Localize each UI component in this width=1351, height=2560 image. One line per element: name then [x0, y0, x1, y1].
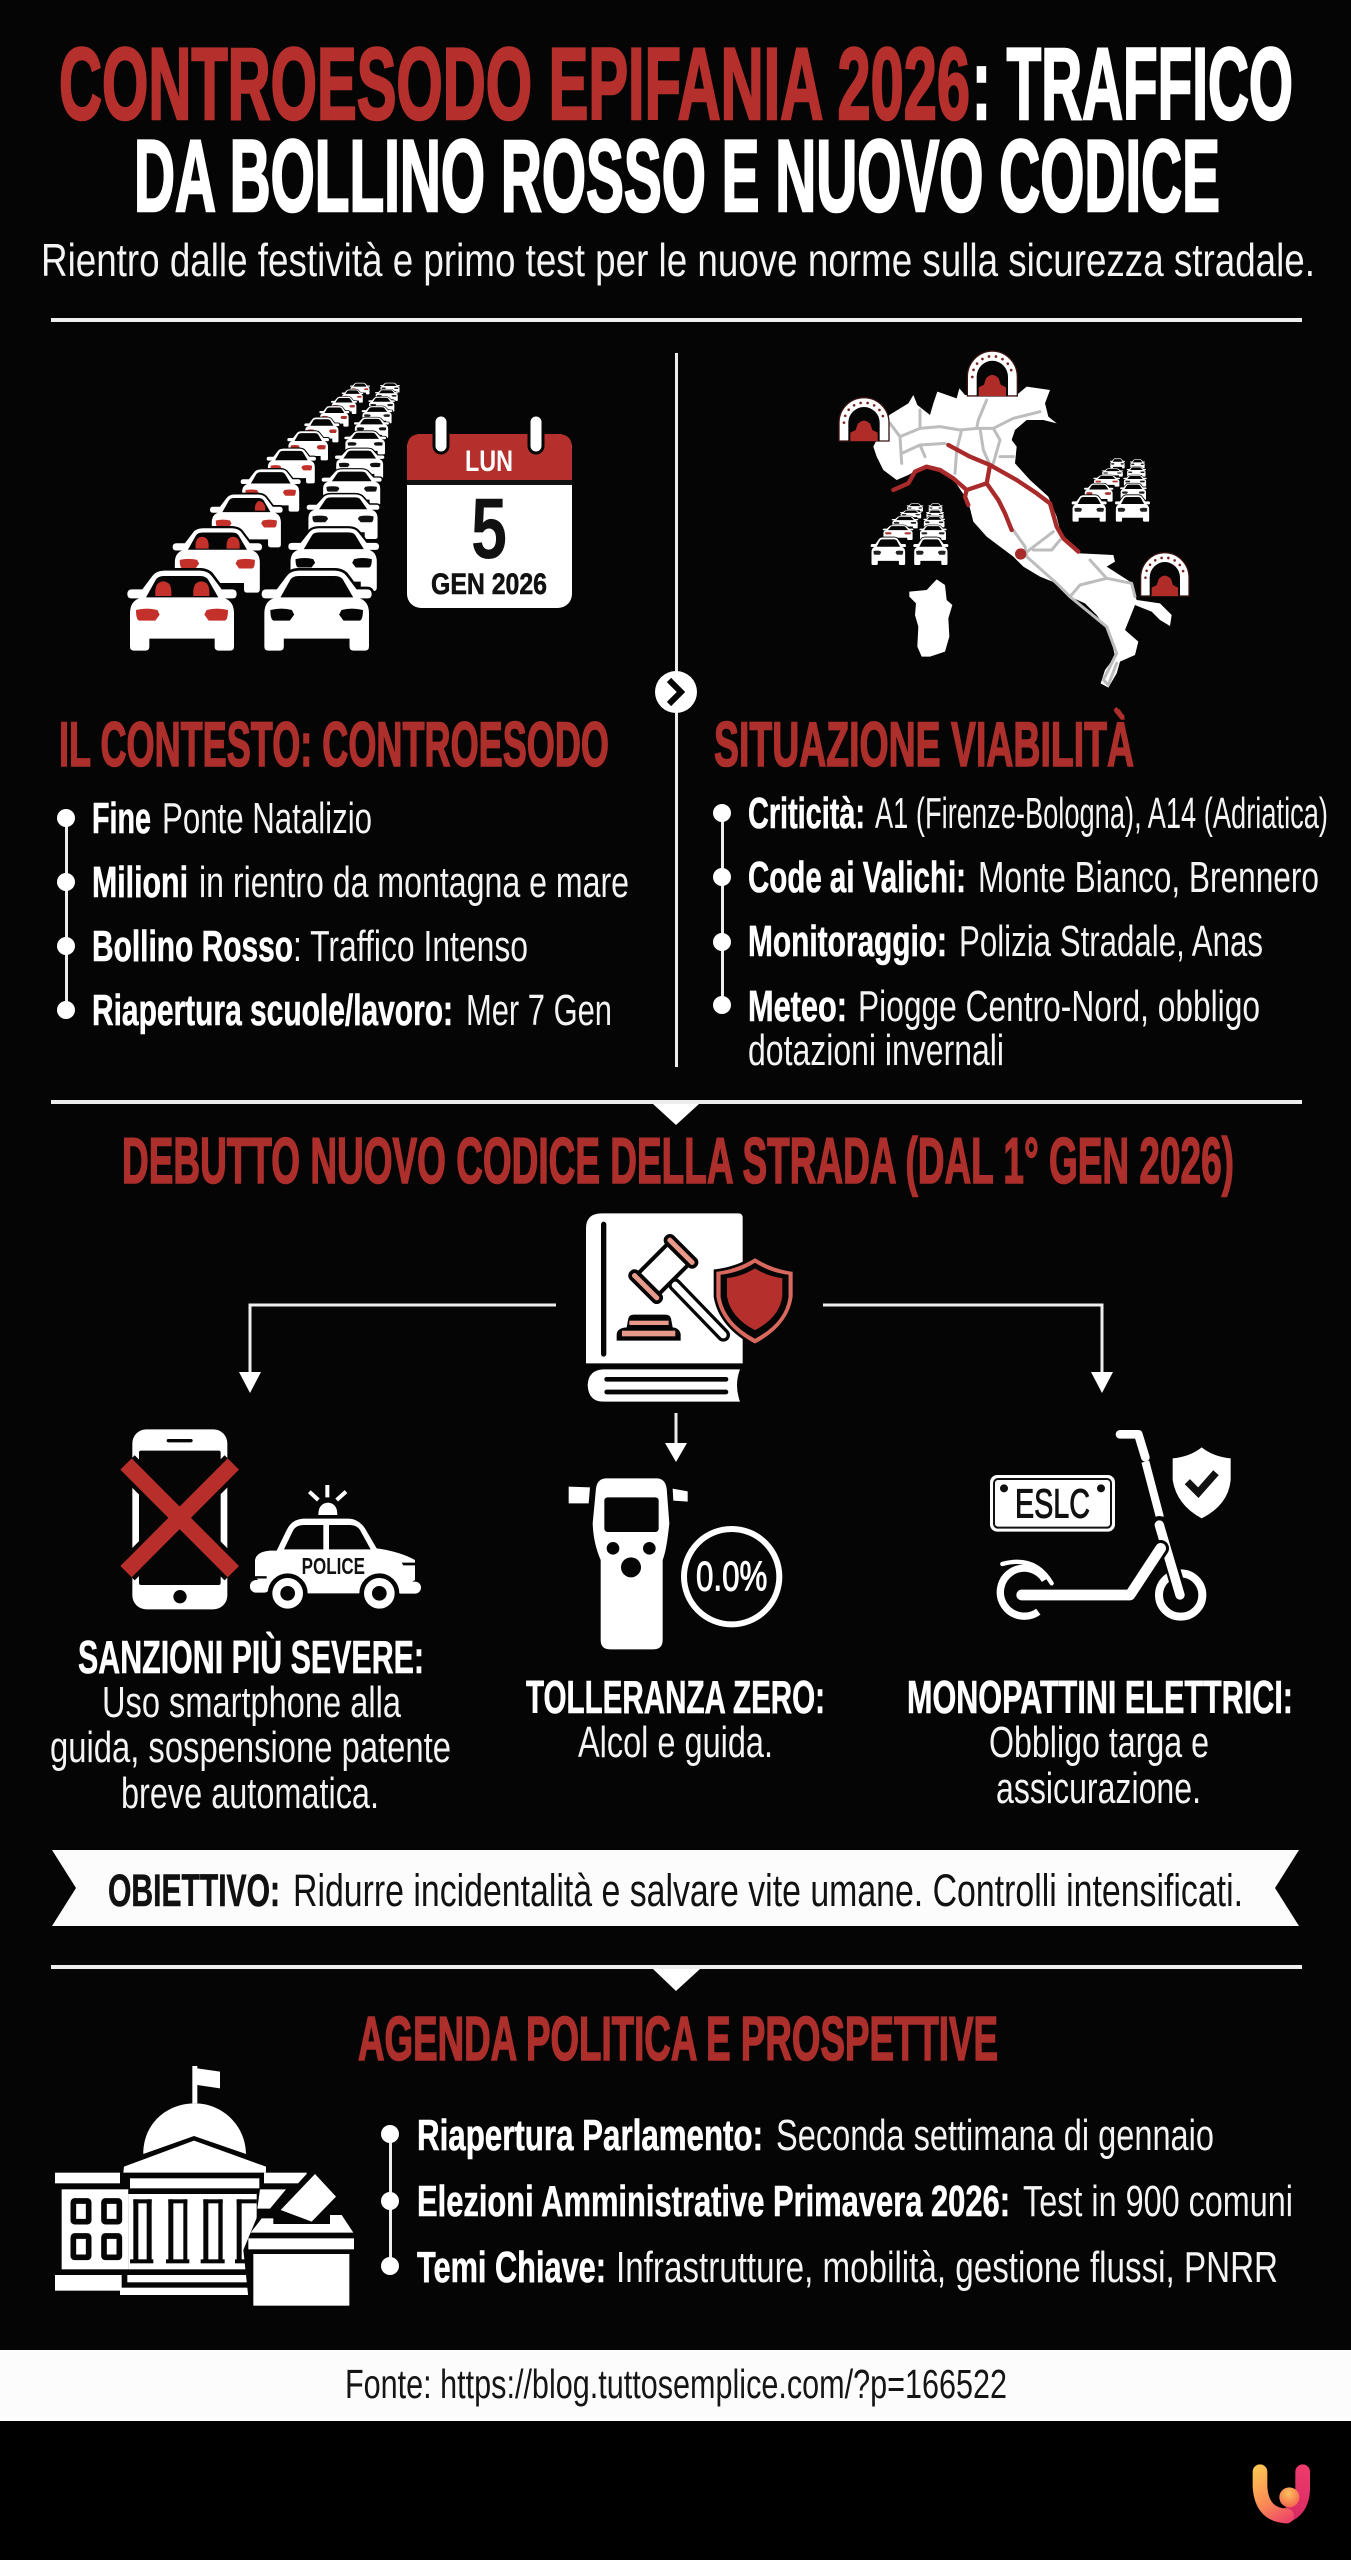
- callout: obiettivo banner: OBIETTIVO:: [108, 1865, 280, 1916]
- bullet list: agenda: [381, 2111, 1293, 2292]
- bullet list: contesto: [57, 794, 629, 1035]
- icon: calendar: [407, 415, 572, 608]
- text block: sanzioni: guida, sospensione patente: [50, 1723, 451, 1772]
- text block: monopattini: [907, 1671, 1293, 1813]
- callout: obiettivo banner: [52, 1850, 1299, 1926]
- text block: tolleranza zero: Alcol e guida.: [578, 1718, 773, 1767]
- icon: Sardinia: [909, 579, 952, 657]
- icon: map traffic right: [1072, 458, 1150, 522]
- footer: source band: Fonte: https://blog.tuttosemplice.com/?p=166522: [345, 2361, 1007, 2407]
- bullet list: agenda: Elezioni Amministrative Primavera 2026:: [417, 2177, 1010, 2226]
- bullet list: viabilita: [713, 789, 1328, 1075]
- title: [59, 27, 1293, 233]
- icon: map traffic left: [871, 503, 948, 565]
- icon: calendar: GEN 2026: [431, 568, 547, 601]
- icon: law book with gavel and shield: [586, 1213, 794, 1402]
- icon: brand logo: [1260, 2472, 1303, 2516]
- bullet list: contesto: Milioni: [92, 858, 188, 907]
- bullet list: contesto: Mer 7 Gen: [466, 986, 612, 1035]
- bullet list: contesto: in rientro da montagna e mare: [199, 858, 629, 907]
- icon: calendar: LUN: [465, 445, 513, 478]
- text block: sanzioni: Uso smartphone alla: [102, 1678, 401, 1727]
- icon: electric scooter with plate and shield: ESLC: [1015, 1481, 1090, 1527]
- bullet list: contesto: Fine: [92, 794, 151, 843]
- icon: traffic queue: [127, 383, 400, 651]
- icon: chevron connector: [655, 671, 697, 713]
- icon: police car: [250, 1485, 421, 1613]
- bullet list: agenda: Temi Chiave:: [417, 2243, 606, 2292]
- arrow: section pointer: [653, 1104, 699, 1125]
- text block: sanzioni: [50, 1631, 451, 1818]
- icon: electric scooter with plate and shield: [990, 1434, 1231, 1617]
- icon: breathalyzer: [569, 1478, 779, 1649]
- icon: calendar: 5: [471, 481, 507, 577]
- icon: zero percent badge: 0.0%: [696, 1553, 767, 1600]
- icon: police car: POLICE: [302, 1553, 365, 1579]
- icon: zero percent badge: [684, 1529, 779, 1624]
- bullet list: agenda: Riapertura Parlamento:: [417, 2111, 763, 2160]
- text block: tolleranza zero: TOLLERANZA ZERO:: [526, 1671, 825, 1723]
- text block: tolleranza zero: [526, 1671, 825, 1767]
- bullet list: viabilita: dotazioni invernali: [748, 1026, 1004, 1075]
- heading: il contesto: IL CONTESTO: CONTROESODO: [59, 710, 609, 780]
- bullet list: contesto: Ponte Natalizio: [162, 794, 372, 843]
- arrow: to right column: [823, 1305, 1102, 1378]
- bullet list: viabilita: Code ai Valichi:: [748, 853, 966, 902]
- arrow: to left column: [250, 1305, 556, 1378]
- icon: phone crossed out: [126, 1429, 233, 1609]
- bullet list: contesto: : Traffico Intenso: [293, 922, 528, 971]
- text block: sanzioni: breve automatica.: [121, 1769, 379, 1818]
- footer: source band: [0, 2350, 1351, 2421]
- icon: map of Italy with roads: [839, 351, 1189, 717]
- text block: monopattini: assicurazione.: [996, 1764, 1201, 1813]
- icon: tunnels: [839, 351, 1189, 596]
- bullet list: viabilita: Meteo:: [748, 982, 847, 1031]
- text block: sanzioni: SANZIONI PIÙ SEVERE:: [78, 1631, 424, 1683]
- text block: monopattini: Obbligo targa e: [989, 1718, 1209, 1767]
- bullet list: contesto: Bollino Rosso: [92, 922, 293, 971]
- icon: parliament with ballot box: [55, 2066, 354, 2307]
- bullet list: agenda: Seconda settimana di gennaio: [776, 2111, 1214, 2160]
- bullet list: viabilita: Criticità:: [748, 789, 865, 838]
- bullet list: contesto: Riapertura scuole/lavoro:: [92, 986, 453, 1035]
- arrow: to middle column: [674, 1413, 678, 1448]
- bullet list: viabilita: Monitoraggio:: [748, 917, 947, 966]
- arrow: section pointer: [653, 1969, 700, 1991]
